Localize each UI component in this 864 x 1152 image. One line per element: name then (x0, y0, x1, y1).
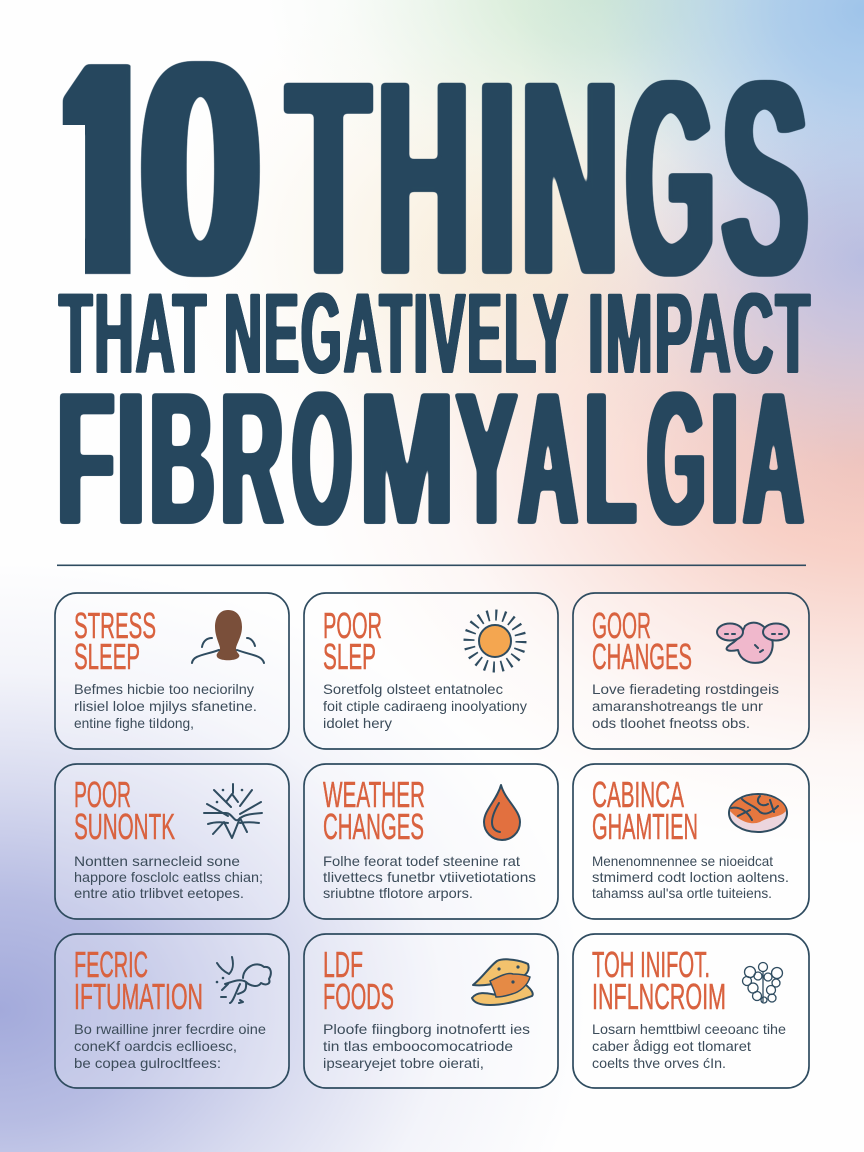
title line: fibromyalgia: L (585, 353, 636, 565)
heading: SLEEP (74, 636, 140, 677)
panel: stress sleep (55, 593, 289, 749)
heading (74, 944, 203, 1017)
body text: ipsearyejet tobre oierati, (323, 1055, 484, 1071)
body text: foit ctiple cadiraeng inoolyationy (323, 698, 527, 714)
title line: fibromyalgia (57, 353, 803, 565)
heading (323, 944, 394, 1017)
infographic canvas (54, 60, 811, 1089)
heading: FOODS (323, 976, 394, 1017)
icon: sun (469, 615, 521, 667)
title line: fibromyalgia: O (292, 353, 352, 565)
panel: weather changes (304, 764, 558, 919)
body text: idolet hery (323, 715, 392, 731)
body text: coneKf oardcis ecllioesc, (74, 1038, 237, 1054)
title numeral: 0: 0 (140, 0, 261, 339)
heading: SUNONTK (74, 806, 175, 847)
body text (74, 853, 263, 901)
heading: SLEP (323, 636, 376, 677)
title line: THINGS: G (626, 22, 715, 333)
body text (74, 1021, 266, 1071)
panel: poor sunontk (55, 764, 289, 919)
body text: Folhe feorat todef steenine rat (323, 853, 520, 869)
heading: LDF (323, 944, 363, 985)
body text: rlisiel loloe mjilys sfanetine. (74, 698, 257, 714)
body text: Bo rwailline jnrer fecrdire oine (74, 1021, 266, 1037)
icon: neck pain (192, 610, 264, 663)
body text: entine fighe tiIdong, (74, 715, 194, 731)
body text: Menenomnennee se nioeidcat (592, 853, 773, 869)
body text: amaranshotreangs tle unr (592, 698, 763, 714)
icon: plate (729, 794, 787, 832)
body text: coelts thve orves ćIn. (592, 1055, 726, 1071)
panel: cabinca ghamtien (573, 764, 809, 919)
body text: entre atio trlibvet eetopes. (74, 885, 244, 901)
body text: caber ådigg eot tlomaret (592, 1038, 751, 1054)
title line: THINGS: I (478, 22, 516, 333)
title line: that negatively impact: THAT (59, 270, 208, 398)
body text: stmimerd codt loction aoltens. (592, 869, 789, 885)
heading: CABINCA (592, 774, 684, 815)
body text (592, 681, 779, 731)
icon: organs (717, 623, 789, 663)
heading: CHANGES (592, 636, 692, 677)
panel: fecric ifumation (55, 934, 289, 1088)
title line: THINGS: N (521, 22, 619, 333)
heading: IFTUMATION (74, 976, 203, 1017)
icon: nerves and cloud (216, 957, 271, 1003)
panel: goor changes (573, 593, 809, 749)
body text: tlivettecs funetbr vtiivetiotations (323, 869, 536, 885)
heading: STRESS (74, 605, 156, 646)
title line: THINGS: H (378, 22, 470, 333)
body text: Love fieradeting rostdingeis (592, 681, 779, 697)
body text (323, 681, 527, 731)
panel: ldf foods (304, 934, 558, 1088)
heading (323, 605, 382, 677)
heading: CHANGES (323, 806, 424, 847)
heading: WEATHER (323, 774, 425, 815)
heading (592, 944, 726, 1017)
title line: fibromyalgia: F (57, 353, 114, 565)
icon: pain burst (204, 784, 262, 838)
body text: ods tloohet fneotss obs. (592, 715, 750, 731)
title line: fibromyalgia: M (360, 353, 454, 565)
body text: be copea gulrocltfees: (74, 1055, 221, 1071)
title line: THINGS: T (287, 22, 370, 333)
title line: fibromyalgia: I (709, 353, 740, 565)
heading (323, 774, 425, 847)
heading: POOR (74, 774, 131, 815)
body text (592, 853, 789, 901)
title line: fibromyalgia: Y (456, 353, 517, 565)
heading: GOOR (592, 605, 651, 646)
heading: GHAMTIEN (592, 806, 698, 847)
title line: fibromyalgia: I (116, 353, 145, 565)
body text: Nontten sarnecleid sone (74, 853, 240, 869)
heading (592, 605, 692, 677)
icon: drop (484, 785, 520, 840)
title line: fibromyalgia: G (648, 353, 705, 565)
body text: Soretfolg olsteet entatnolec (323, 681, 503, 697)
icon: fatty food (472, 959, 533, 1005)
body text (323, 853, 536, 901)
heading: INFLNCROIM (592, 976, 726, 1017)
body text (74, 681, 257, 731)
body text: tahamss aul'sa ortle tuiteiens. (592, 885, 772, 901)
heading (74, 605, 156, 677)
title (58, 60, 811, 526)
body text: sriubtne tflotore arpors. (323, 885, 473, 901)
body text: happore fosclolc eatlss chian; (74, 869, 263, 885)
heading: POOR (323, 605, 382, 646)
title line: THINGS (287, 22, 808, 333)
panel: poor sleep (304, 593, 558, 749)
body text: Befmes hicbie too neciorilny (74, 681, 254, 697)
body text (323, 1021, 530, 1071)
title line: fibromyalgia: R (221, 353, 283, 565)
body text: Losarn hemttbiwl ceeoanc tihe (592, 1021, 786, 1037)
title line: fibromyalgia: A (518, 353, 578, 565)
title line: fibromyalgia: B (150, 353, 215, 565)
heading: TOH INIFOT. (592, 944, 710, 985)
heading (592, 774, 698, 847)
heading: FECRIC (74, 944, 148, 985)
body text: Ploofe fiingborg inotnofertt ies (323, 1021, 530, 1037)
panel: toh inifot inflncroim (573, 934, 809, 1088)
title: 1 (68, 0, 142, 339)
icon: brain (742, 962, 782, 1003)
heading (74, 774, 175, 847)
body text: tin tlas emboocomocatriode (323, 1038, 513, 1054)
body text (592, 1021, 786, 1071)
